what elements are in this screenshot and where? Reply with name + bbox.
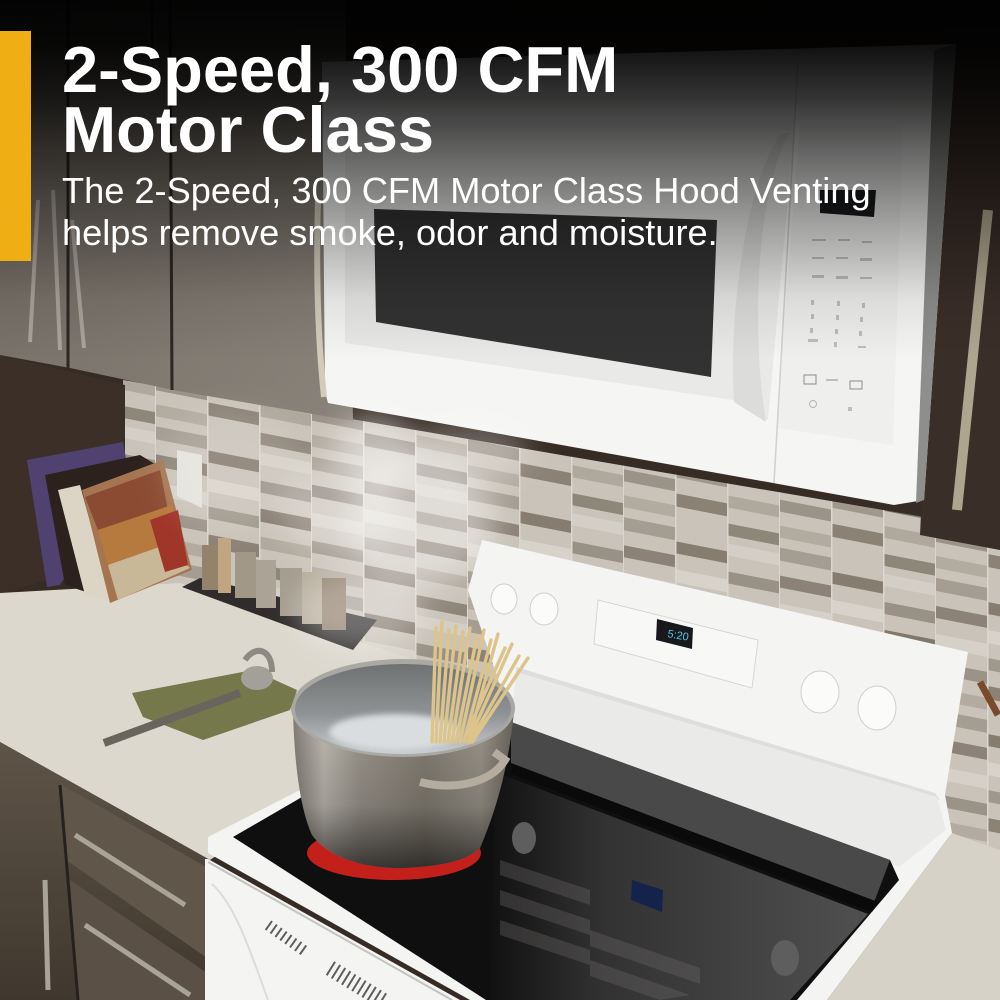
microwave window: [374, 209, 717, 377]
range vents: [268, 925, 306, 952]
accent bar: [0, 31, 31, 261]
glass cooktop: [233, 722, 899, 1000]
range knobs: [491, 584, 896, 730]
counter left: [0, 583, 520, 860]
cooktop tile reflection: [500, 860, 700, 1000]
range lower slope: [511, 672, 946, 867]
title: 2-Speed, 300 CFM: [62, 33, 618, 106]
microwave display: [820, 190, 876, 217]
electric range: [205, 540, 968, 1000]
description: [62, 170, 871, 253]
glowing burner: [307, 826, 481, 880]
range digital clock: [656, 619, 693, 649]
range display panel: [594, 600, 758, 688]
lower cabinets: [0, 742, 212, 1000]
outlet: [177, 450, 202, 508]
pot with boiling water: [291, 659, 515, 868]
cabinet door edge handle near microwave: [317, 200, 324, 397]
microwave keypad: [804, 239, 872, 411]
cookbooks: [27, 442, 192, 603]
steam: [160, 410, 530, 650]
electric range: 5:20: [666, 628, 690, 644]
cooktop reflected display: [631, 880, 663, 912]
range lower vents: [330, 968, 385, 1000]
spice tray and jars: [182, 538, 377, 650]
spaghetti: [432, 622, 528, 742]
cooktop grey reflection: [511, 722, 890, 905]
title: Motor Class: [62, 93, 434, 166]
microwave handle: [733, 133, 790, 422]
range front panel: [205, 859, 460, 1000]
utensil at right edge: [980, 682, 998, 715]
counter right: [827, 833, 1000, 1000]
description: helps remove smoke, odor and moisture.: [62, 212, 718, 253]
title: [62, 33, 618, 166]
description: The 2-Speed, 300 CFM Motor Class Hood Venting: [62, 170, 871, 211]
range backguard shadow line: [516, 667, 940, 800]
upper cabinets: [0, 0, 353, 421]
cooktop black stripe: [511, 763, 878, 912]
backsplash tile: [123, 380, 1000, 860]
dark overlay behind title: [0, 0, 1000, 360]
over-the-range microwave: [322, 44, 956, 505]
pot handle: [420, 752, 505, 786]
left dark wall panel: [0, 355, 125, 593]
cooktop reflected knobs: [512, 822, 799, 976]
towel and ladle: [104, 651, 297, 743]
right tall cabinet: [920, 0, 1000, 550]
